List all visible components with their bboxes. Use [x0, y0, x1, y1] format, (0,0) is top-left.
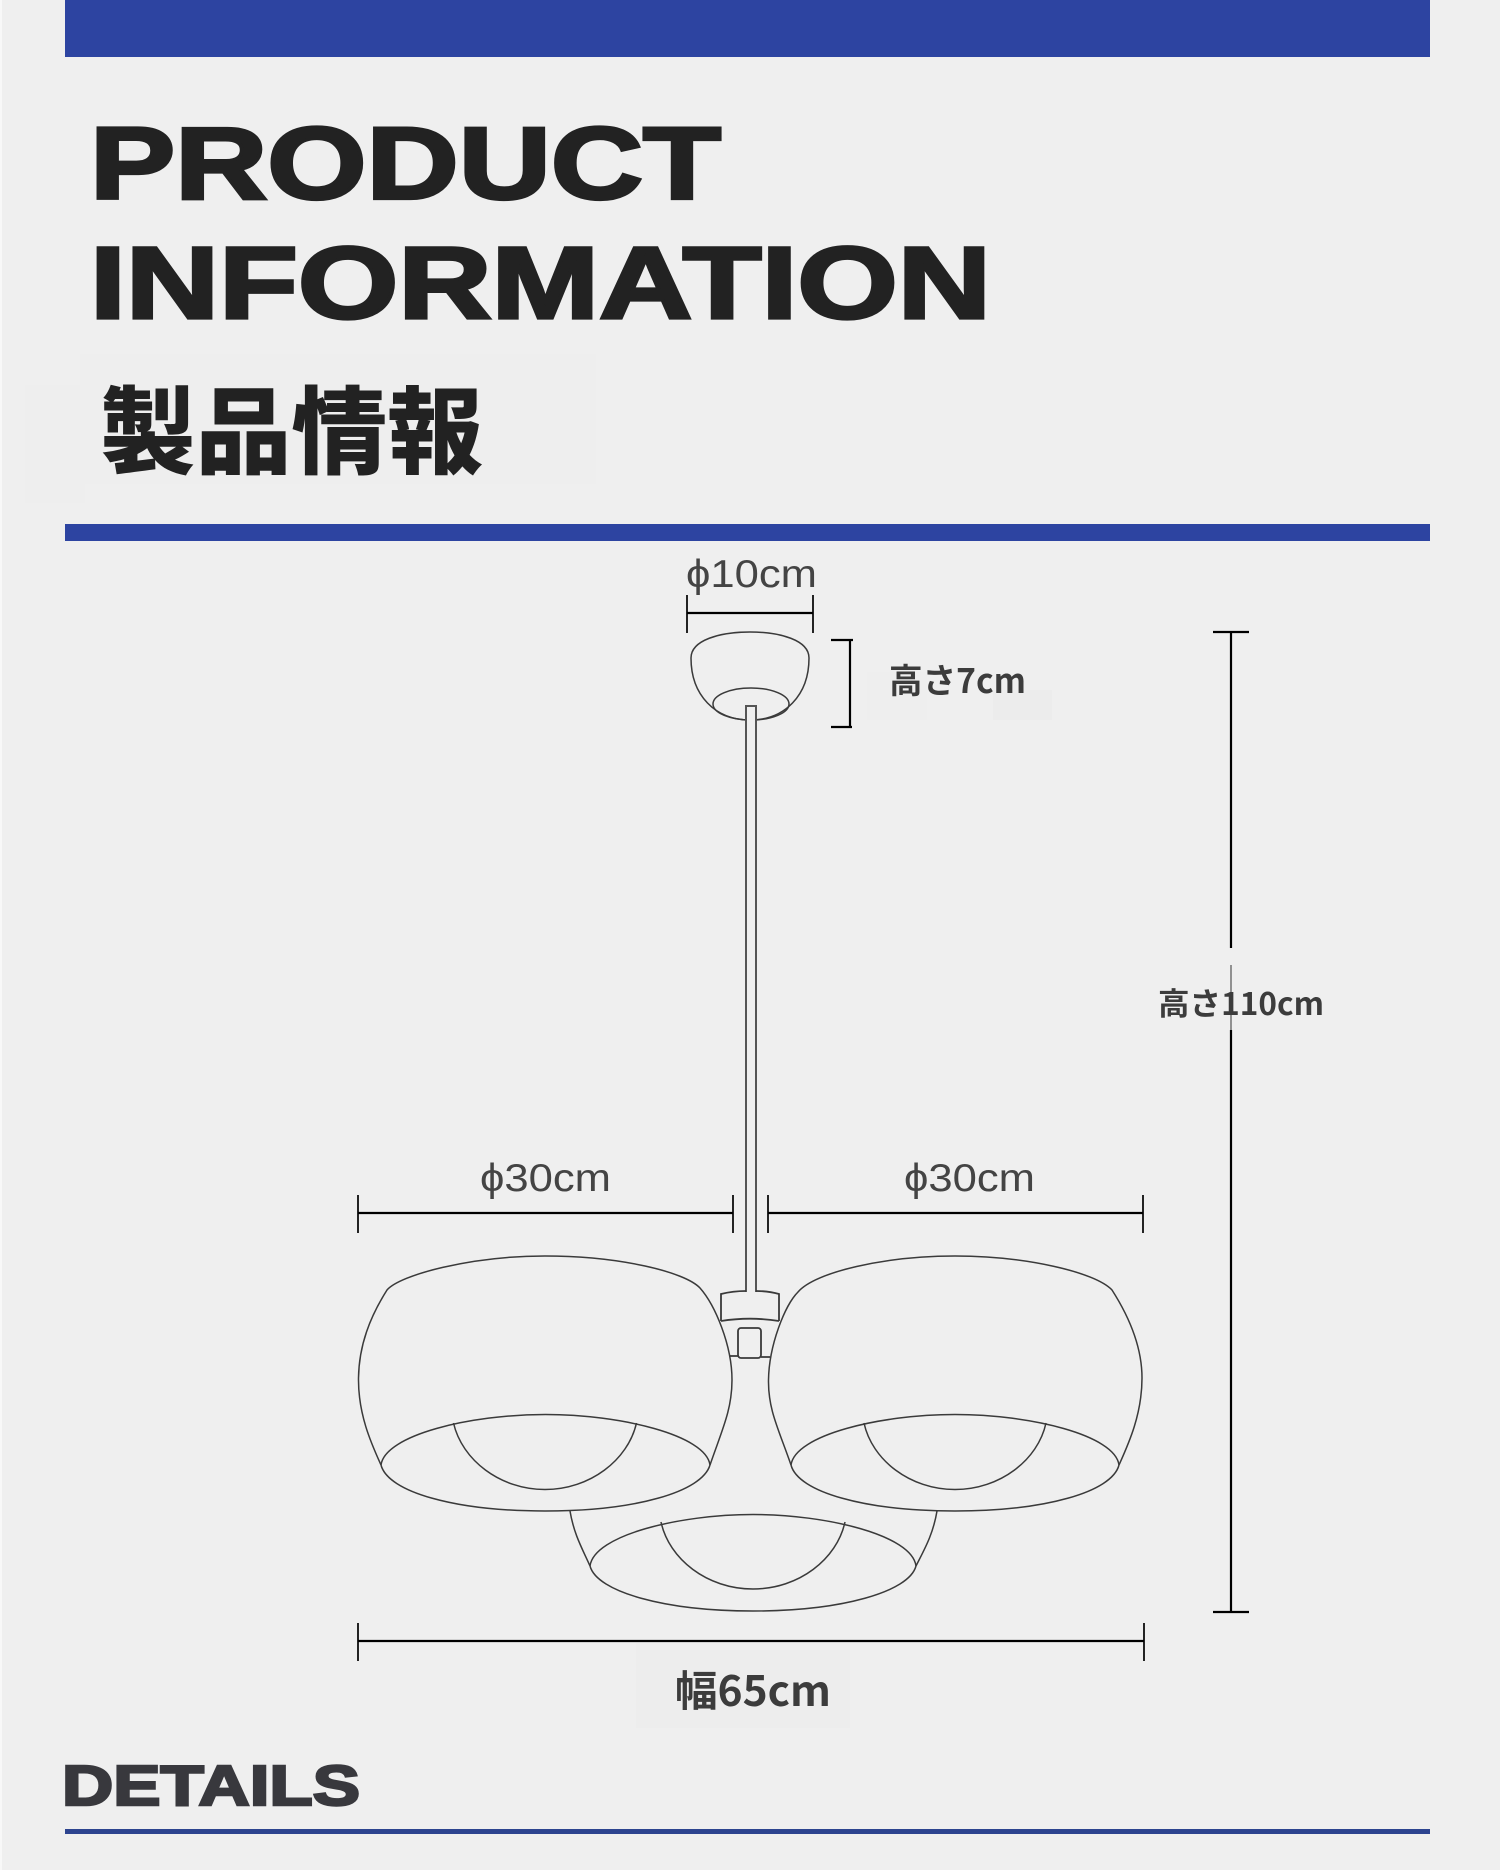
label: left shade diameter: ϕ30cm — [480, 1157, 611, 1200]
cup height dimension — [831, 640, 1026, 727]
dimension line: overall width — [358, 1640, 1144, 1642]
ceiling cup — [691, 632, 809, 720]
details heading: DETAILS — [62, 1754, 360, 1818]
top header bar — [65, 0, 1430, 57]
pendant lamp drawing — [358, 706, 1142, 1611]
hub — [721, 1291, 779, 1358]
dimension line: left shade — [358, 1212, 733, 1214]
dimension line: cup diameter — [687, 612, 813, 614]
title: Japanese subtitle: 製品情報 — [100, 357, 483, 494]
dimension line: total height — [1213, 632, 1249, 1612]
dimension line: right shade — [768, 1212, 1143, 1214]
ceiling cup diameter dimension — [686, 553, 817, 633]
section divider bar — [65, 524, 1430, 541]
rod — [746, 706, 756, 1292]
title: PRODUCT INFORMATION — [90, 106, 991, 340]
label: cup diameter: ϕ10cm — [686, 553, 817, 596]
left shade diameter dimension — [358, 1157, 733, 1233]
label: total height: 高さ110cm — [1158, 979, 1324, 1024]
total height dimension — [1158, 632, 1324, 1612]
dimension bracket: cup height — [831, 640, 853, 727]
details underline bar — [65, 1829, 1430, 1834]
title line 2: INFORMATION — [90, 226, 991, 340]
right shade diameter dimension — [768, 1157, 1143, 1233]
right shade — [768, 1256, 1142, 1511]
label: cup height: 高さ7cm — [889, 654, 1026, 703]
label: overall width: 幅65cm — [675, 1658, 831, 1719]
overall width dimension — [358, 1623, 1144, 1719]
title line 1: PRODUCT — [90, 106, 721, 220]
center shade — [570, 1511, 937, 1611]
label: right shade diameter: ϕ30cm — [904, 1157, 1035, 1200]
left shade — [358, 1256, 732, 1511]
